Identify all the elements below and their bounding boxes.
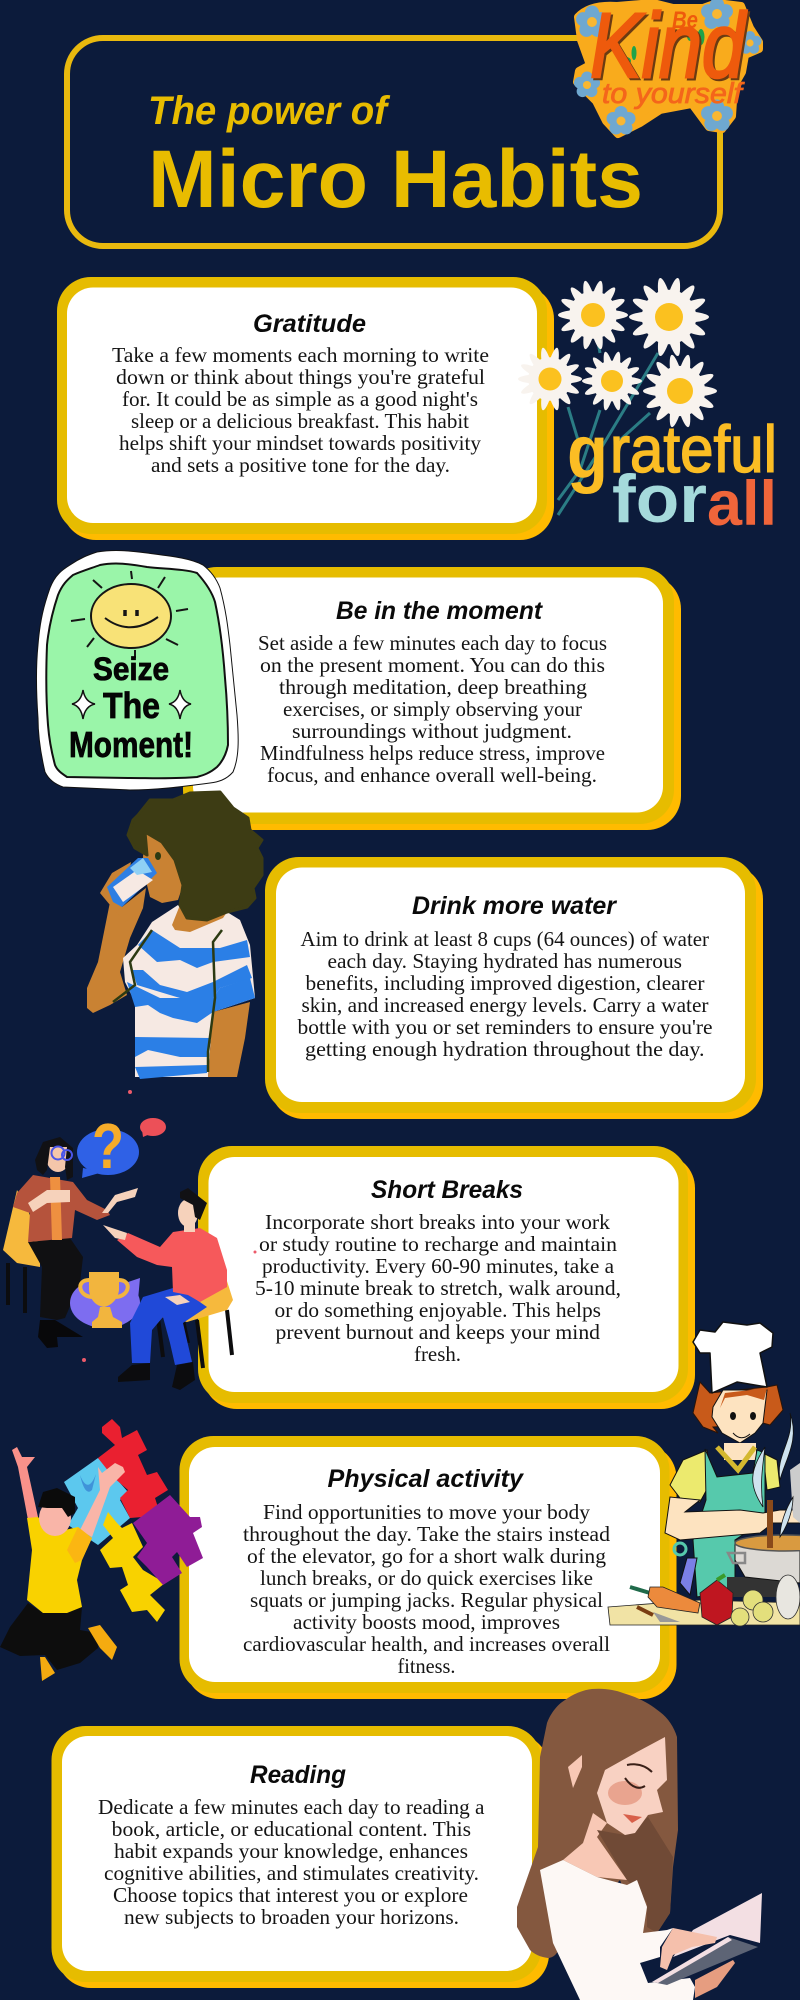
text: reading body: Choose topics that interest you or explore xyxy=(113,1883,468,1907)
text: physical activity body: of the elevator, go for a short walk during xyxy=(247,1544,607,1568)
text: physical activity body: fitness. xyxy=(398,1654,456,1678)
icon: vegetables on board xyxy=(608,1575,800,1626)
text: moment body: Set aside a few minutes each day to focus xyxy=(258,631,607,655)
heading: physical activity: Physical activity xyxy=(328,1465,524,1493)
panel: be in the moment xyxy=(183,567,681,830)
illustration: two people talking xyxy=(3,1110,233,1390)
panel: reading xyxy=(52,1726,549,1988)
text: gratitude body: helps shift your mindset towards positivity xyxy=(119,431,482,455)
text: moment body: Mindfulness helps reduce stress, improve xyxy=(260,741,605,765)
sticker: be kind to yourself: Kind xyxy=(592,0,749,99)
text: physical activity body: cardiovascular health, and increases overall xyxy=(243,1632,610,1656)
icon: hair xyxy=(517,1689,678,1958)
illustration: woman drinking water xyxy=(87,792,262,1079)
icon: chef body xyxy=(665,1443,800,1597)
text: gratitude body xyxy=(112,343,489,477)
heading: gratitude: Gratitude xyxy=(253,310,366,338)
text: gratitude body: down or think about things you're grateful xyxy=(116,365,485,389)
heading: be in the moment: Be in the moment xyxy=(336,597,544,625)
icon: shirt xyxy=(540,1860,695,2000)
text: short breaks body: 5-10 minute break to stretch, walk around, xyxy=(255,1276,621,1300)
panel: title frame xyxy=(67,38,720,246)
icon: woman xyxy=(13,1137,138,1348)
text: water body: benefits, including improved digestion, clearer xyxy=(306,971,704,995)
text: gratitude body: for. It could be as simple as a good night's xyxy=(122,387,478,411)
text: gratitude body: Take a few moments each morning to write xyxy=(112,343,489,367)
icon: chef hair and face xyxy=(693,1382,783,1443)
text: short breaks body: or study routine to recharge and maintain xyxy=(259,1232,618,1256)
sticker: seize the moment: Moment! xyxy=(69,724,193,765)
heading: short breaks: Short Breaks xyxy=(371,1176,523,1204)
panel: short breaks xyxy=(198,1146,695,1409)
text: short breaks body: prevent burnout and keeps your mind xyxy=(276,1320,601,1344)
text: reading body: cognitive abilities, and stimulates creativity. xyxy=(104,1861,479,1885)
decorative dots xyxy=(82,1090,256,1362)
text: water body: Aim to drink at least 8 cups (64 ounces) of water xyxy=(300,927,709,951)
text: reading body: Dedicate a few minutes each day to reading a xyxy=(98,1795,485,1819)
illustration: chef cooking xyxy=(608,1322,800,1626)
text: moment body: surroundings without judgment. xyxy=(292,719,572,743)
text: moment body: on the present moment. You can do this xyxy=(260,653,605,677)
sticker: be kind to yourself: to yourself xyxy=(602,78,745,110)
illustration: daisies with grateful for all: for xyxy=(612,461,707,537)
text: gratitude body: sleep or a delicious breakfast. This habit xyxy=(131,409,469,433)
heading: micro habits: Micro Habits xyxy=(148,134,643,225)
icon: question bubble: ? xyxy=(92,1110,124,1182)
text: moment body: focus, and enhance overall well-being. xyxy=(267,763,597,787)
illustration: daisies with grateful for all xyxy=(518,276,777,539)
illustration: daisies with grateful for all: g xyxy=(567,410,608,495)
icon: book xyxy=(652,1893,762,1998)
text: physical activity body xyxy=(243,1500,611,1678)
panel: drink more water xyxy=(265,857,763,1119)
illustration: person with puzzle pieces xyxy=(0,1419,203,1681)
text: moment body: through meditation, deep breathing xyxy=(279,675,588,699)
icon: man xyxy=(103,1188,227,1390)
icon: question bubble xyxy=(77,1110,166,1182)
text: moment body xyxy=(258,631,607,787)
text: reading body: new subjects to broaden your horizons. xyxy=(124,1905,459,1929)
text: water body xyxy=(298,927,712,1061)
text: physical activity body: Find opportunities to move your body xyxy=(263,1500,591,1524)
sticker: seize the moment: Seize xyxy=(93,651,169,687)
illustration: daisies with grateful for all: rateful xyxy=(610,412,777,486)
text: short breaks body xyxy=(255,1210,621,1366)
text: moment body: exercises, or simply observing your xyxy=(283,697,582,721)
sticker: seize the moment xyxy=(36,550,238,790)
text: physical activity body: throughout the day. Take the stairs instead xyxy=(243,1522,611,1546)
icon: trophy xyxy=(70,1272,140,1328)
text: gratitude body: and sets a positive tone for the day. xyxy=(151,453,450,477)
text: reading body: habit expands your knowledge, enhances xyxy=(114,1839,468,1863)
icon: chairs xyxy=(3,1190,233,1368)
text: short breaks body: or do something enjoyable. This helps xyxy=(274,1298,601,1322)
text: physical activity body: activity boosts mood, improves xyxy=(293,1610,560,1634)
icon: neck and face xyxy=(563,1737,673,1933)
text: reading body xyxy=(98,1795,485,1929)
text: water body: each day. Staying hydrated has numerous xyxy=(328,949,682,973)
sticker: seize the moment: The xyxy=(103,685,160,726)
panel: physical activity xyxy=(180,1436,676,1699)
heading: reading: Reading xyxy=(250,1761,346,1789)
text: water body: bottle with you or set reminders to ensure you're xyxy=(298,1015,712,1039)
panel: gratitude xyxy=(57,277,554,540)
text: short breaks body: fresh. xyxy=(414,1342,461,1366)
heading: drink more water: Drink more water xyxy=(412,892,617,920)
text: physical activity body: lunch breaks, or do quick exercises like xyxy=(260,1566,593,1590)
text: short breaks body: Incorporate short breaks into your work xyxy=(265,1210,611,1234)
icon: pot and steam xyxy=(727,1413,800,1597)
text: reading body: book, article, or educational content. This xyxy=(112,1817,471,1841)
text: water body: skin, and increased energy levels. Carry a water xyxy=(302,993,709,1017)
sticker: be kind to yourself: Be xyxy=(672,7,698,34)
text: water body: getting enough hydration throughout the day. xyxy=(305,1037,704,1061)
sticker: be kind to yourself xyxy=(574,0,762,134)
illustration: daisies with grateful for all: all xyxy=(707,469,777,539)
text: physical activity body: squats or jumping jacks. Regular physical xyxy=(250,1588,603,1612)
text: short breaks body: productivity. Every 60-90 minutes, take a xyxy=(262,1254,615,1278)
illustration: girl reading a book xyxy=(517,1689,762,2000)
heading: the power of: The power of xyxy=(148,89,391,133)
icon: chef hat xyxy=(693,1322,773,1393)
